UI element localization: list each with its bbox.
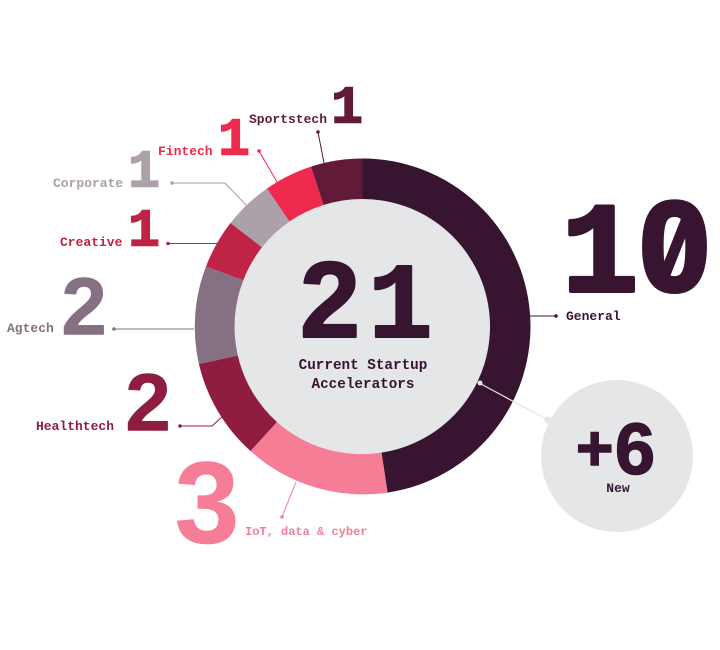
segment: Agtech (195, 266, 243, 364)
Corporate leader (170, 181, 247, 206)
segment: Sportstech (311, 158, 362, 205)
segment: Corporate (230, 188, 290, 247)
total number: 1 (368, 248, 433, 370)
segment: Healthtech (199, 356, 277, 451)
Corporate count: 1 (128, 142, 160, 202)
Sportstech label: Sportstech (249, 112, 327, 127)
General leader (530, 314, 558, 318)
Sportstech count: 1 (331, 78, 363, 138)
General count: 1 (562, 185, 638, 330)
Fintech label: Fintech (158, 144, 213, 159)
IoT leader (280, 482, 296, 519)
Fintech leader (257, 149, 277, 182)
Creative leader (166, 242, 217, 245)
segment: General (362, 158, 530, 493)
General label: General (566, 309, 621, 324)
segment: Fintech (267, 167, 324, 222)
Creative label: Creative (60, 235, 123, 250)
new count: 6 (615, 410, 655, 490)
Healthtech label: Healthtech (36, 419, 114, 434)
connector to new bubble (478, 380, 552, 424)
IoT count: 3 (175, 438, 239, 568)
segment: IoT, data & cyber (250, 422, 388, 494)
new caption: New (606, 481, 630, 496)
total caption: Current Startup (299, 358, 427, 374)
total caption: Accelerators (312, 377, 414, 393)
new count: + (576, 412, 613, 484)
Sportstech leader (316, 130, 324, 163)
total number: 2 (300, 239, 360, 360)
Corporate label: Corporate (53, 176, 123, 191)
General count: 0 (639, 176, 710, 319)
IoT label: IoT, data & cyber (245, 525, 367, 539)
Fintech count: 1 (218, 110, 250, 170)
centre disc (234, 198, 490, 454)
donut chart (195, 158, 530, 494)
Agtech leader (112, 327, 194, 331)
General count (562, 176, 710, 330)
Healthtech count: 2 (125, 358, 171, 448)
Agtech label: Agtech (7, 321, 54, 336)
segment: Creative (206, 223, 262, 280)
new bubble (541, 380, 693, 532)
Healthtech leader (178, 417, 222, 428)
Agtech count: 2 (61, 262, 107, 352)
Creative count: 1 (128, 202, 160, 262)
